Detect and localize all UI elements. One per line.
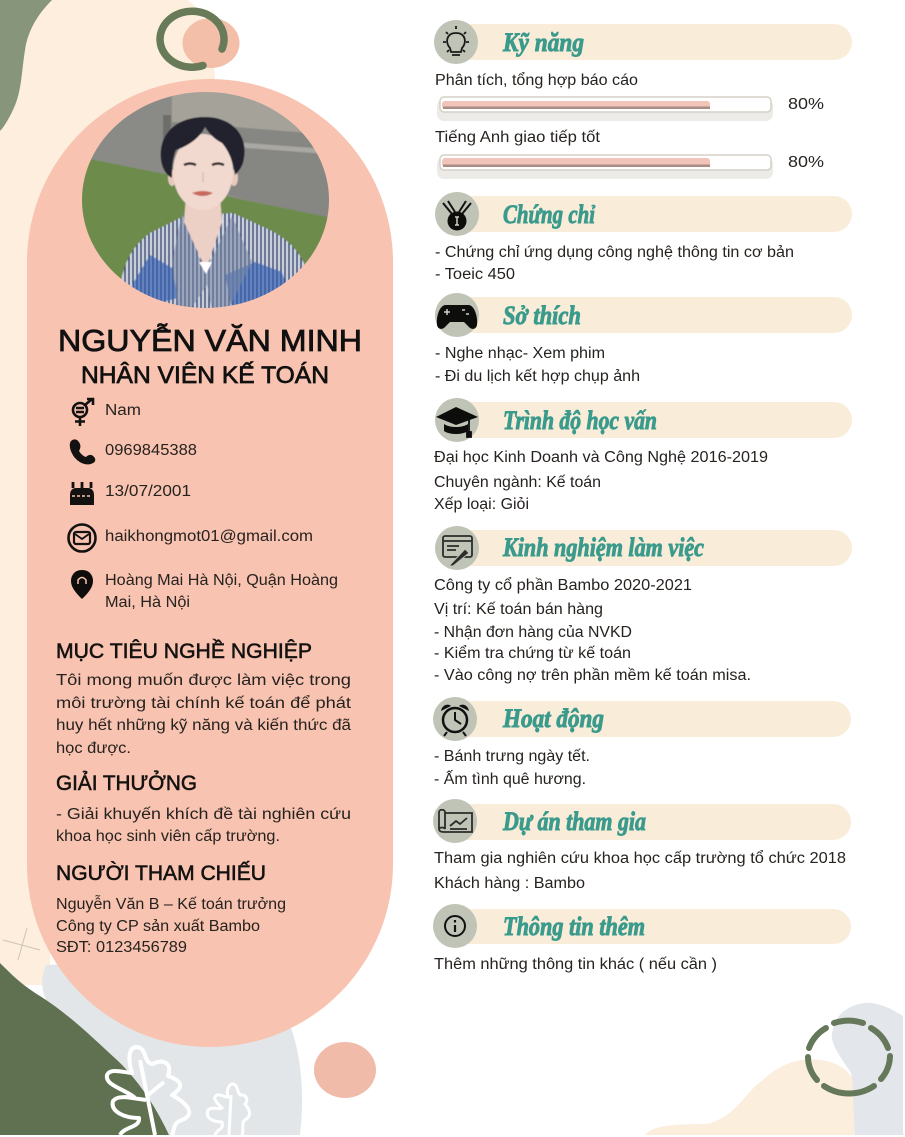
shape: green blob bottom left — [0, 963, 169, 1135]
section: skills: Kỹ năng — [502, 28, 584, 57]
job title: NHÂN VIÊN KẾ TOÁN — [81, 361, 329, 389]
contact: email: haikhongmot01@gmail.com — [105, 528, 313, 545]
section: skills: Phân tích, tổng hợp báo cáo — [435, 72, 638, 89]
name: NGUYỄN VĂN MINH — [58, 323, 362, 358]
section: projects — [433, 799, 851, 892]
section: awards: - Giải khuyến khích đề tài nghiên cứu — [56, 806, 351, 823]
section: awards — [56, 771, 351, 845]
progress bar: analysis — [437, 97, 773, 121]
section: certificates — [435, 192, 852, 283]
section: work experience — [434, 526, 852, 684]
section: awards: khoa học sinh viên cấp trường. — [56, 828, 280, 845]
section: projects: Dự án tham gia — [502, 807, 646, 836]
contact: address: Hoàng Mai Hà Nội, Quận Hoàng — [105, 572, 338, 589]
section: hobbies: Sở thích — [503, 301, 581, 330]
icon: light bulb — [434, 20, 478, 64]
section: education: Chuyên ngành: Kế toán — [434, 474, 601, 491]
section: career objective: huy hết những kỹ năng và kiến thức đã — [56, 717, 351, 734]
icon: small white leaf — [207, 1084, 250, 1135]
section: work experience: - Vào công nợ trên phần mềm kế toán misa. — [434, 667, 751, 684]
section: work experience: Kinh nghiệm làm việc — [502, 533, 704, 562]
shape: beige blob left — [0, 0, 215, 985]
contact: gender — [73, 399, 141, 426]
section: career objective: học được. — [56, 740, 131, 757]
icon: medal — [435, 192, 479, 236]
shape: grey blob bottom right — [832, 1003, 903, 1135]
section: more information: Thêm những thông tin khác ( nếu cần ) — [434, 956, 717, 973]
decoration: cross lines — [3, 928, 40, 960]
contact: gender: Nam — [105, 402, 141, 419]
section: hobbies: - Đi du lịch kết hợp chụp ảnh — [435, 368, 640, 385]
icon: alarm clock — [433, 697, 477, 741]
section: certificates: Chứng chỉ — [503, 200, 596, 229]
section: certificates: - Toeic 450 — [435, 266, 515, 283]
section: hobbies: - Nghe nhạc- Xem phim — [435, 345, 605, 362]
section: work experience: Công ty cổ phần Bambo 2020-2021 — [434, 577, 692, 594]
icon: chart scroll — [433, 799, 477, 843]
section: career objective: Tôi mong muốn được làm việc trong — [56, 672, 351, 689]
section: skills: 80% — [788, 96, 824, 113]
icon: green ring top — [160, 11, 224, 67]
section: work experience: - Nhận đơn hàng của NVKD — [434, 624, 632, 641]
contact: phone — [70, 439, 197, 464]
section: hobbies — [435, 293, 852, 385]
section: education — [434, 398, 852, 513]
section: work experience: Vị trí: Kế toán bán hàng — [434, 601, 603, 618]
section: activities: - Ấm tình quê hương. — [434, 771, 586, 788]
section: projects: Tham gia nghiên cứu khoa học cấp trường tổ chức 2018 — [434, 850, 846, 867]
section: skills — [434, 20, 852, 179]
section: references: Nguyễn Văn B – Kế toán trưởng — [56, 896, 286, 913]
icon: gamepad — [435, 293, 479, 337]
section: references: SĐT: 0123456789 — [56, 939, 187, 956]
section: career objective — [56, 640, 352, 757]
section: awards: GIẢI THƯỞNG — [56, 771, 197, 795]
section: references: Công ty CP sản xuất Bambo — [56, 918, 260, 935]
section: work experience: - Kiểm tra chứng từ kế toán — [434, 645, 631, 662]
section: more information: Thông tin thêm — [503, 912, 645, 941]
icon: info — [433, 904, 477, 948]
panel: left profile — [27, 79, 393, 1047]
section: career objective: MỤC TIÊU NGHỀ NGHIỆP — [56, 640, 312, 663]
shape: beige wave bottom right — [645, 1059, 905, 1135]
section: references: NGƯỜI THAM CHIẾU — [56, 862, 266, 885]
icon: large white leaf — [107, 1047, 189, 1135]
section: skills: 80% — [788, 154, 824, 171]
section: certificates: - Chứng chỉ ứng dụng công nghệ thông tin cơ bản — [435, 244, 794, 261]
progress bar: english — [437, 155, 773, 179]
section: activities: Hoạt động — [502, 704, 604, 733]
section: references — [56, 862, 286, 956]
section: activities — [433, 697, 851, 788]
contact: birthday: 13/07/2001 — [105, 483, 191, 500]
icon: peach circle top — [182, 18, 240, 68]
section: more information — [433, 904, 851, 973]
photo: portrait — [80, 90, 332, 310]
section: education: Xếp loại: Giỏi — [434, 496, 529, 513]
icon: dashed ring bottom right — [808, 1021, 890, 1093]
icon: certificate and pen — [435, 526, 479, 570]
contact: email — [68, 524, 313, 552]
section: skills: Tiếng Anh giao tiếp tốt — [435, 129, 601, 146]
shape: grey blob bottom — [42, 960, 302, 1135]
section: education: Trình độ học vấn — [503, 406, 657, 435]
section: activities: - Bánh trưng ngày tết. — [434, 748, 590, 765]
icon: graduation cap — [435, 398, 479, 442]
contact: address — [71, 570, 338, 611]
shape: sage blob top left — [0, 0, 52, 131]
icon: peach circle bottom — [314, 1042, 376, 1098]
contact: address: Mai, Hà Nội — [105, 594, 190, 611]
section: projects: Khách hàng : Bambo — [434, 875, 585, 892]
section: career objective: môi trường tài chính kế toán để phát — [56, 695, 352, 712]
contact: phone: 0969845388 — [105, 442, 197, 459]
contact: birthday — [70, 482, 191, 505]
section: education: Đại học Kinh Doanh và Công Nghệ 2016-2019 — [434, 449, 768, 466]
